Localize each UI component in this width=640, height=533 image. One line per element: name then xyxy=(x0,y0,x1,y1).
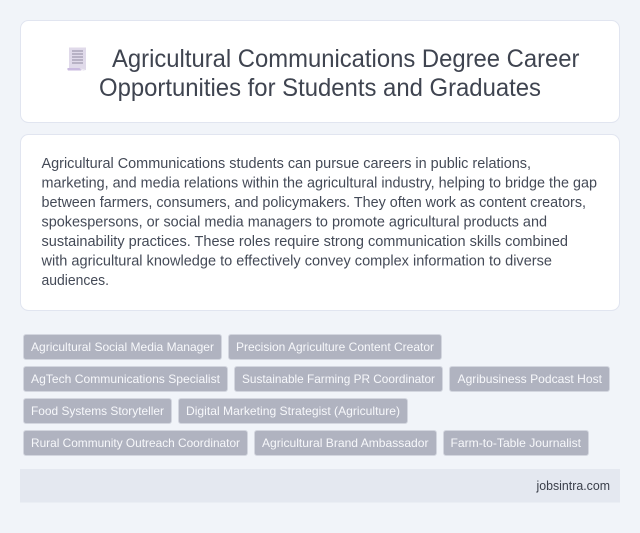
career tags xyxy=(24,334,610,456)
description text: Agricultural Communications students can pursue careers in public relations, xyxy=(42,156,531,172)
tag xyxy=(24,334,222,360)
footer bar xyxy=(20,469,620,502)
description text: spokespersons, or social media managers to promote agricultural products and xyxy=(42,214,547,230)
description text: sustainability practices. These roles require strong communication skills combined xyxy=(42,234,568,250)
description text xyxy=(40,156,597,289)
tag: Sustainable Farming PR Coordinator xyxy=(242,372,435,386)
tag: Digital Marketing Strategist (Agriculture) xyxy=(186,404,400,418)
tag: Food Systems Storyteller xyxy=(31,404,164,418)
tag: Rural Community Outreach Coordinator xyxy=(31,436,240,450)
tag xyxy=(24,398,172,424)
tag xyxy=(254,430,436,456)
footer source text: jobsintra.com xyxy=(536,479,610,493)
tag xyxy=(444,430,588,456)
description text: between farmers, consumers, and policymakers. They often work as content creators, xyxy=(42,195,586,211)
description text: marketing, and media relations within the agricultural industry, helping to bridge the gap xyxy=(42,176,597,192)
title line 1: Agricultural Communications Degree Career xyxy=(112,45,580,73)
title line 2: Opportunities for Students and Graduates xyxy=(99,74,541,102)
tag xyxy=(234,366,442,392)
tag: Farm-to-Table Journalist xyxy=(450,436,582,450)
tag: Agricultural Brand Ambassador xyxy=(262,436,428,450)
tag xyxy=(24,366,228,392)
description text: audiences. xyxy=(42,273,109,289)
tag: Agribusiness Podcast Host xyxy=(458,372,603,386)
description text: with agricultural knowledge to effectively convey complex information to diverse xyxy=(40,254,552,270)
panel: header card xyxy=(20,20,620,122)
tag xyxy=(450,366,610,392)
tag: AgTech Communications Specialist xyxy=(31,372,221,386)
tag xyxy=(24,430,248,456)
icon: document scroll xyxy=(67,48,86,71)
tag: Agricultural Social Media Manager xyxy=(31,340,214,354)
tag: Precision Agriculture Content Creator xyxy=(236,340,434,354)
tag xyxy=(178,398,408,424)
tag xyxy=(228,334,442,360)
panel: description card xyxy=(20,134,620,310)
